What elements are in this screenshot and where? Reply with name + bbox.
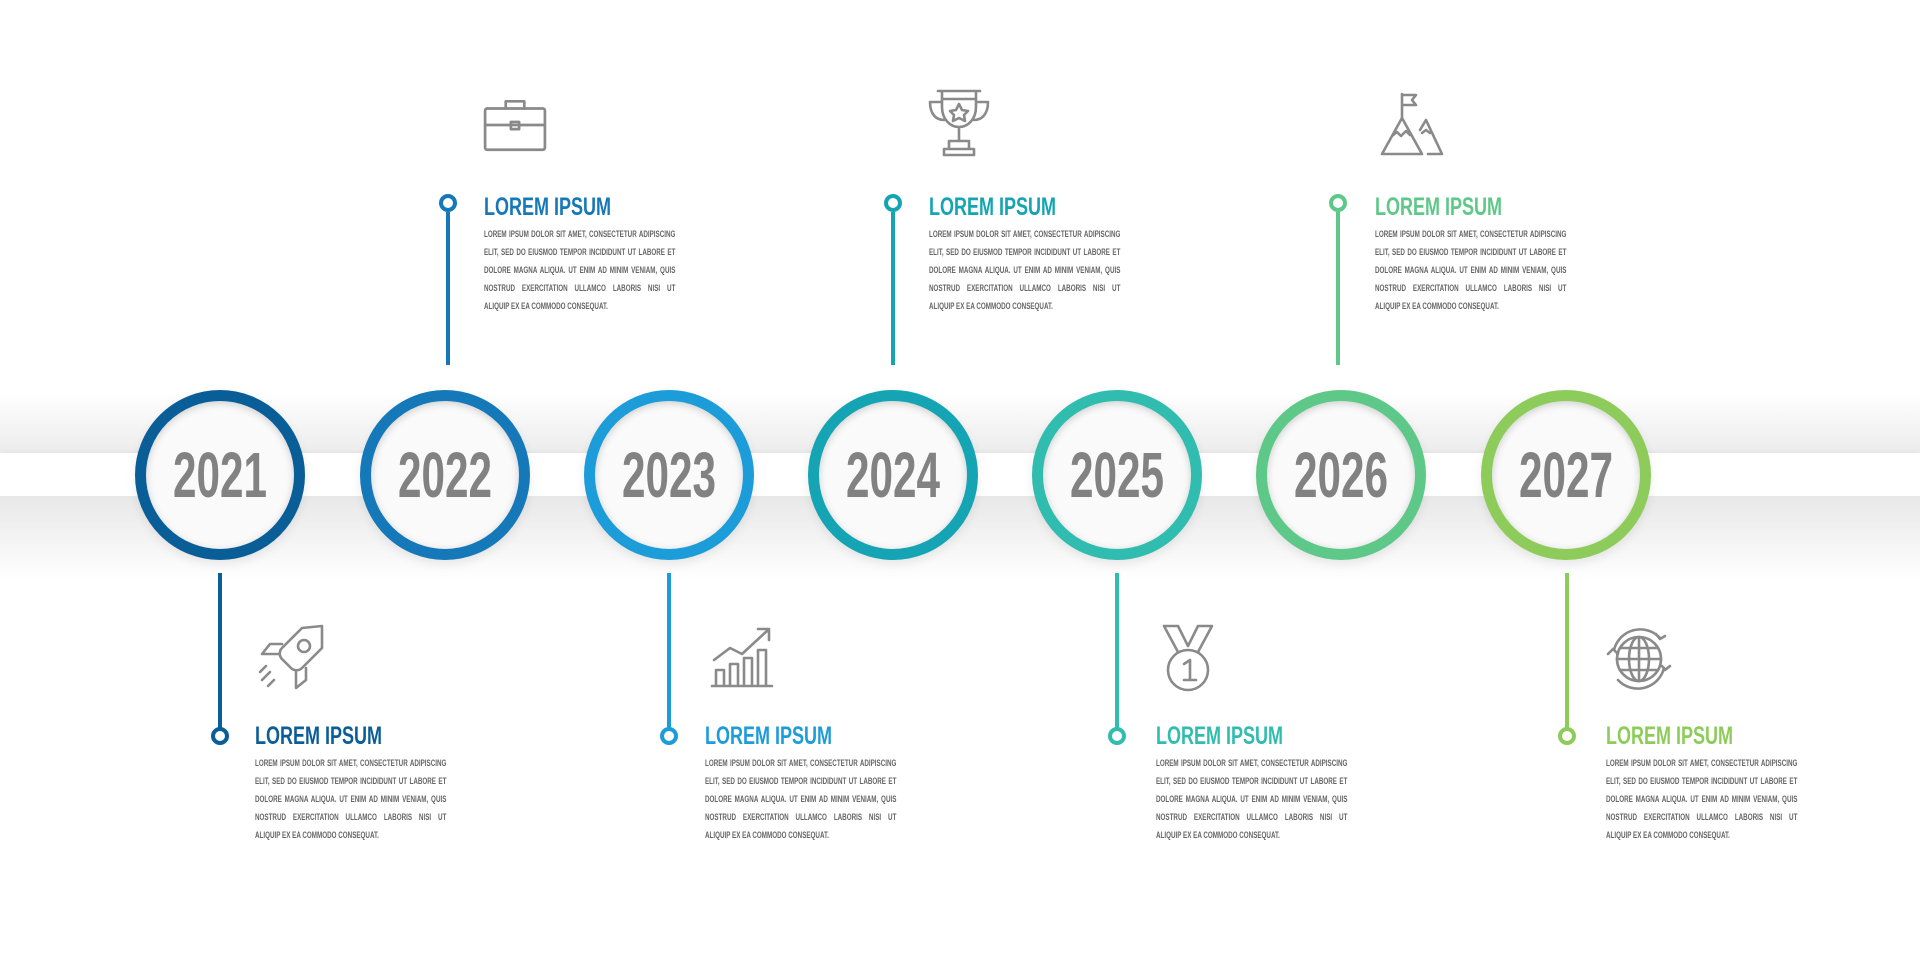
circle 2022 [360, 390, 530, 560]
circle 2026: 2026 [1294, 439, 1388, 511]
text 2027 [1606, 722, 1798, 841]
dot 2022 [439, 194, 457, 212]
text 2025: LOREM IPSUM DOLOR SIT AMET, CONSECTETUR ADIPISCING ELIT, SED DO EIUSMOD TEMPOR INCIDIDUNT UT LABORE ET DOLORE MAGNA ALIQUA. UT ENIM AD MINIM VENIAM, QUIS NOSTRUD EXERCITATION ULLAMCO LABORIS NISI UT ALIQUIP EX EA COMMODO CONSEQUAT. [1156, 758, 1347, 841]
stem 2026 [1336, 212, 1340, 365]
circle 2022: 2022 [398, 439, 492, 511]
icon: rocket [258, 624, 324, 690]
icon: bar chart [710, 628, 774, 688]
circle 2023: 2023 [622, 439, 716, 511]
text 2027: LOREM IPSUM DOLOR SIT AMET, CONSECTETUR ADIPISCING ELIT, SED DO EIUSMOD TEMPOR INCIDIDUNT UT LABORE ET DOLORE MAGNA ALIQUA. UT ENIM AD MINIM VENIAM, QUIS NOSTRUD EXERCITATION ULLAMCO LABORIS NISI UT ALIQUIP EX EA COMMODO CONSEQUAT. [1606, 758, 1797, 841]
text 2022: LOREM IPSUM [484, 193, 611, 221]
text 2025 [1156, 722, 1348, 841]
text 2024 [929, 193, 1120, 312]
stem 2023 [667, 573, 671, 728]
icon: briefcase [484, 100, 546, 152]
circle 2024 [808, 390, 978, 560]
text 2025: LOREM IPSUM [1156, 722, 1283, 750]
dot 2027 [1558, 727, 1576, 745]
circle 2021 [135, 390, 305, 560]
circle 2023 [584, 390, 754, 560]
text 2026: LOREM IPSUM [1375, 193, 1502, 221]
stem 2021 [218, 573, 222, 728]
text 2021: LOREM IPSUM [255, 722, 382, 750]
circle 2025 [1032, 390, 1202, 560]
text 2021 [255, 722, 446, 841]
dot 2021 [211, 727, 229, 745]
text 2022 [484, 193, 676, 312]
text 2023 [705, 722, 896, 841]
stem 2024 [891, 212, 895, 365]
stem 2025 [1115, 573, 1119, 728]
dot 2026 [1329, 194, 1347, 212]
text 2023: LOREM IPSUM [705, 722, 832, 750]
circle 2025: 2025 [1070, 439, 1164, 511]
text 2026: LOREM IPSUM DOLOR SIT AMET, CONSECTETUR ADIPISCING ELIT, SED DO EIUSMOD TEMPOR INCIDIDUNT UT LABORE ET DOLORE MAGNA ALIQUA. UT ENIM AD MINIM VENIAM, QUIS NOSTRUD EXERCITATION ULLAMCO LABORIS NISI UT ALIQUIP EX EA COMMODO CONSEQUAT. [1375, 229, 1566, 312]
circle 2027 [1481, 390, 1651, 560]
text 2023: LOREM IPSUM DOLOR SIT AMET, CONSECTETUR ADIPISCING ELIT, SED DO EIUSMOD TEMPOR INCIDIDUNT UT LABORE ET DOLORE MAGNA ALIQUA. UT ENIM AD MINIM VENIAM, QUIS NOSTRUD EXERCITATION ULLAMCO LABORIS NISI UT ALIQUIP EX EA COMMODO CONSEQUAT. [705, 758, 896, 841]
icon: medal [1162, 624, 1214, 692]
text 2021: LOREM IPSUM DOLOR SIT AMET, CONSECTETUR ADIPISCING ELIT, SED DO EIUSMOD TEMPOR INCIDIDUNT UT LABORE ET DOLORE MAGNA ALIQUA. UT ENIM AD MINIM VENIAM, QUIS NOSTRUD EXERCITATION ULLAMCO LABORIS NISI UT ALIQUIP EX EA COMMODO CONSEQUAT. [255, 758, 446, 841]
text 2022: LOREM IPSUM DOLOR SIT AMET, CONSECTETUR ADIPISCING ELIT, SED DO EIUSMOD TEMPOR INCIDIDUNT UT LABORE ET DOLORE MAGNA ALIQUA. UT ENIM AD MINIM VENIAM, QUIS NOSTRUD EXERCITATION ULLAMCO LABORIS NISI UT ALIQUIP EX EA COMMODO CONSEQUAT. [484, 229, 675, 312]
circle 2026 [1256, 390, 1426, 560]
text 2027: LOREM IPSUM [1606, 722, 1733, 750]
icon: mountain flag [1380, 92, 1444, 156]
circle 2021: 2021 [173, 439, 267, 511]
dot 2025 [1108, 727, 1126, 745]
icon: globe [1606, 628, 1672, 690]
circle 2027: 2027 [1519, 439, 1613, 511]
text 2024: LOREM IPSUM [929, 193, 1056, 221]
icon: trophy [928, 90, 990, 156]
dot 2023 [660, 727, 678, 745]
timeline band [0, 418, 1920, 552]
circle 2024: 2024 [846, 439, 940, 511]
text 2024: LOREM IPSUM DOLOR SIT AMET, CONSECTETUR ADIPISCING ELIT, SED DO EIUSMOD TEMPOR INCIDIDUNT UT LABORE ET DOLORE MAGNA ALIQUA. UT ENIM AD MINIM VENIAM, QUIS NOSTRUD EXERCITATION ULLAMCO LABORIS NISI UT ALIQUIP EX EA COMMODO CONSEQUAT. [929, 229, 1120, 312]
dot 2024 [884, 194, 902, 212]
stem 2027 [1565, 573, 1569, 728]
text 2026 [1375, 193, 1566, 312]
stem 2022 [446, 212, 450, 365]
